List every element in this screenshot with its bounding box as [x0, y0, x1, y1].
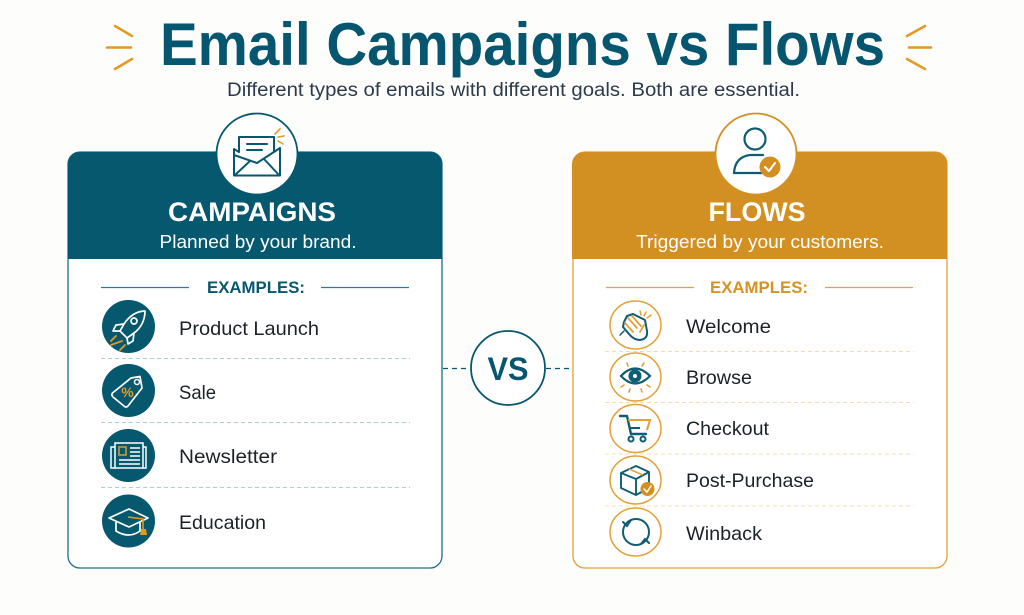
icon: left title accent	[107, 26, 132, 69]
icon: newspaper	[102, 429, 155, 482]
panel body: flows	[573, 152, 947, 568]
panel header: campaigns	[68, 152, 442, 259]
row: Product Launch	[102, 300, 319, 353]
panel: flows	[572, 114, 947, 568]
row: Checkout	[610, 404, 770, 452]
icon: rocket	[102, 300, 155, 353]
icon: open envelope	[216, 114, 298, 194]
connector: VS dashed line	[443, 368, 573, 370]
label: Product Launch	[179, 318, 319, 340]
VS badge: VS	[488, 351, 528, 387]
icon: shopping cart	[610, 404, 661, 452]
heading: campaigns: CAMPAIGNS	[168, 197, 336, 227]
icon: eye	[610, 353, 661, 401]
panel header: flows	[572, 152, 947, 259]
label: Checkout	[686, 418, 770, 440]
heading: flows: FLOWS	[708, 197, 806, 227]
row dividers: campaigns	[101, 358, 410, 488]
examples label: campaigns: EXAMPLES:	[207, 278, 305, 297]
row: Welcome	[610, 301, 771, 349]
row: Post-Purchase	[610, 456, 814, 504]
title: Email Campaigns vs Flows	[160, 11, 885, 78]
icon: waving hand	[610, 301, 661, 349]
subtitle: Different types of emails with different goals. Both are essential.	[227, 80, 800, 101]
row: Winback	[610, 508, 762, 556]
label: Winback	[686, 523, 762, 545]
label: Education	[179, 512, 266, 534]
row: Education	[102, 494, 266, 548]
icon: price tag: %	[121, 384, 134, 400]
panel body: campaigns	[68, 152, 442, 568]
text: flows tagline: Triggered by your customers.	[636, 232, 884, 252]
row: Newsletter	[102, 429, 278, 482]
row dividers: flows	[605, 352, 914, 506]
row: Sale	[102, 364, 216, 417]
label: Welcome	[686, 316, 771, 338]
icon: package with check	[610, 456, 661, 504]
label: Sale	[179, 382, 216, 404]
row: Browse	[610, 353, 752, 401]
icon: circular arrows	[610, 508, 661, 556]
VS badge	[471, 331, 545, 405]
label: Post-Purchase	[686, 470, 814, 492]
text: campaigns tagline: Planned by your brand.	[160, 232, 356, 252]
panel: campaigns	[68, 114, 442, 568]
examples label: flows: EXAMPLES:	[710, 278, 808, 297]
label: Browse	[686, 367, 752, 389]
icon: graduation cap	[102, 494, 155, 548]
label: Newsletter	[179, 446, 278, 468]
icon: person with check	[716, 114, 796, 194]
icon: right title accent	[907, 26, 931, 69]
